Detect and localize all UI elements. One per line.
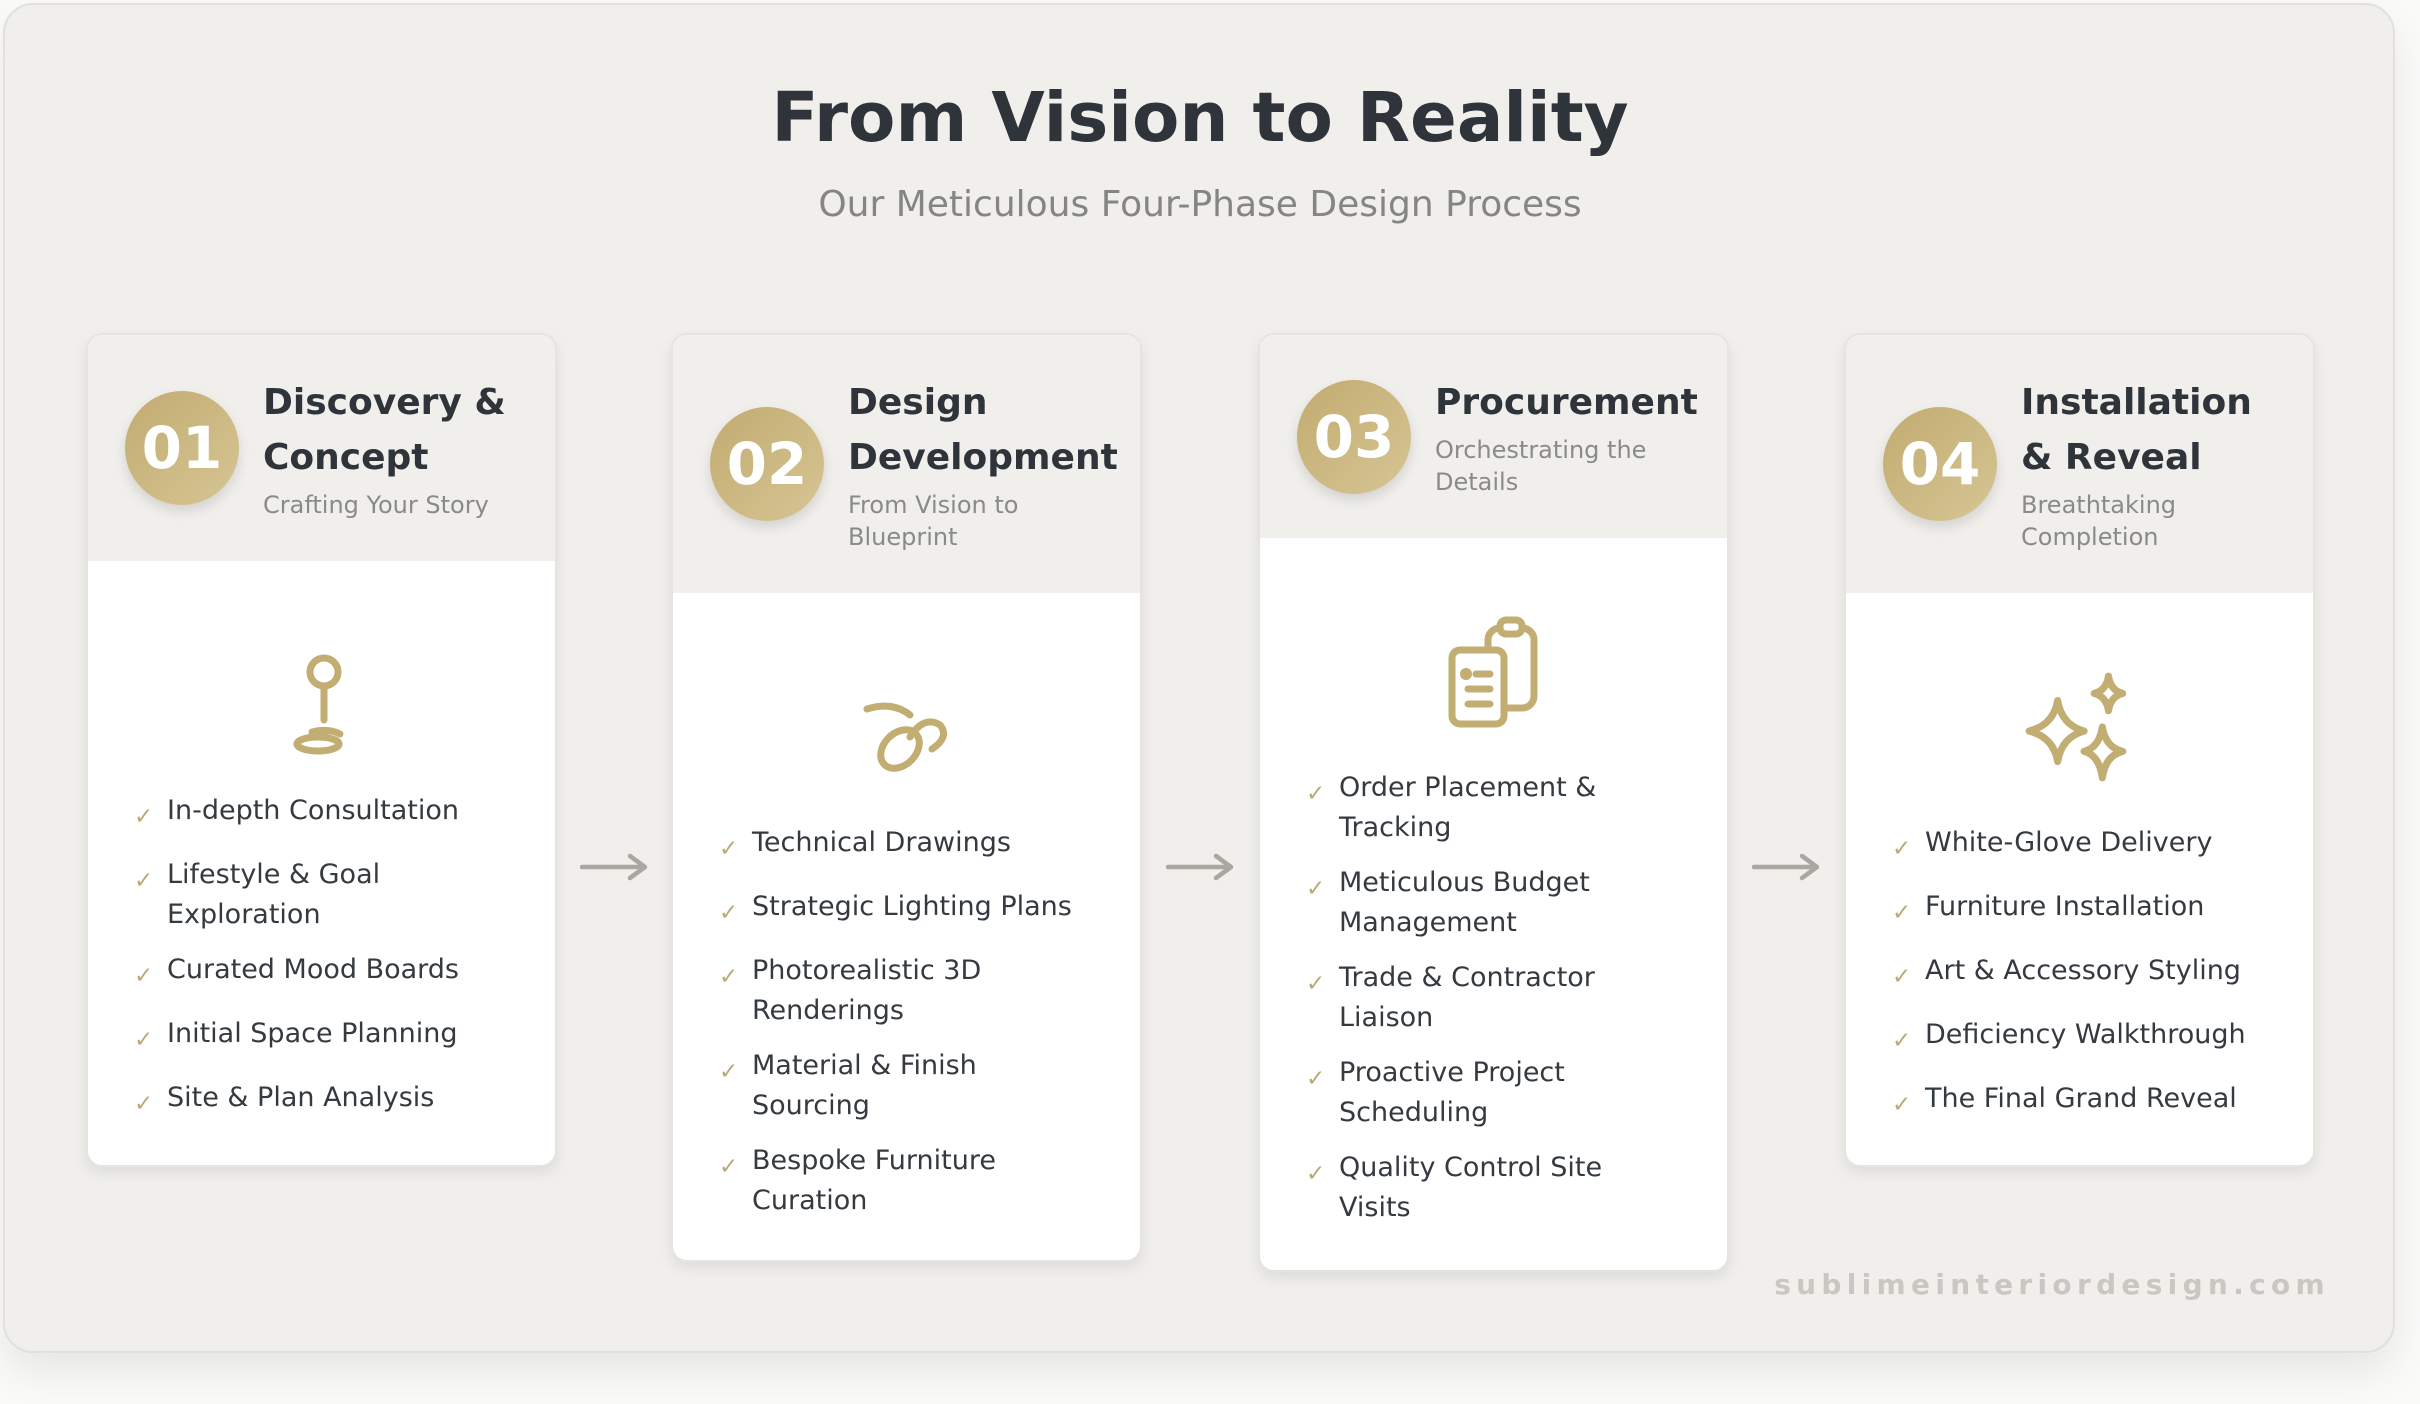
number badge 01: 01 [142,414,222,482]
list: procurement steps: Proactive Project [1339,1057,1565,1088]
card 2 header [673,335,1140,593]
card 1 body [138,654,459,1113]
number badge 04: 04 [1900,430,1980,498]
panel: card 1 discovery [86,333,557,1167]
list: design steps: Bespoke Furniture [752,1145,996,1176]
list: design steps: Technical Drawings [752,827,1011,858]
list: procurement steps: Tracking [1339,812,1451,843]
card 3 heading: Procurement [1435,382,1698,423]
list: discovery steps: Curated Mood Boards [167,954,459,985]
number badge 03: 03 [1314,402,1394,470]
icon: pin [294,654,344,754]
panel: card 3 procurement [1258,333,1729,1272]
icon: link [864,702,948,772]
number badge 02 [710,407,824,521]
card 4 heading: & Reveal [2021,437,2202,478]
list: procurement steps: Meticulous Budget [1339,867,1590,898]
card 4 heading: Installation [2021,382,2252,423]
list: installation steps: Art & Accessory Styling [1925,955,2241,986]
card 1 heading: Concept [263,437,429,478]
list: discovery steps: In-depth Consultation [167,795,459,826]
card 3 heading: Orchestrating the [1435,436,1646,464]
card 3 header [1260,335,1727,538]
list: installation steps [1896,827,2246,1114]
card 4 heading: Completion [2021,523,2158,551]
list: procurement steps: Management [1339,907,1517,938]
card 2 heading [848,382,1118,551]
card 1 header [88,335,555,561]
list: procurement steps: Scheduling [1339,1097,1488,1128]
card 2 heading: Design [848,382,987,423]
number badge 01 [125,391,239,505]
card 4 heading: Breathtaking [2021,491,2176,519]
list: design steps [722,827,1072,1216]
arrow 3 [1752,854,1820,880]
title: From Vision to Reality [771,78,1629,158]
list: discovery steps: Site & Plan Analysis [167,1082,434,1113]
list: discovery steps: Initial Space Planning [167,1018,457,1049]
list: procurement steps: Order Placement & [1339,772,1596,803]
list: procurement steps: Liaison [1339,1002,1433,1033]
card 2 heading: Development [848,437,1118,478]
list: procurement steps [1310,772,1602,1223]
list: installation steps: The Final Grand Reveal [1925,1083,2237,1114]
list: design steps: Sourcing [752,1090,870,1121]
number badge 03 [1297,380,1411,494]
list: installation steps: White-Glove Delivery [1925,827,2212,858]
list: installation steps: Furniture Installation [1925,891,2204,922]
panel: card 2 design [671,333,1142,1262]
list: discovery steps: Lifestyle & Goal [167,859,380,890]
footer website: sublimeinteriordesign.com [1774,1268,2330,1301]
list: discovery steps: Exploration [167,899,321,930]
list: installation steps: Deficiency Walkthrough [1925,1019,2246,1050]
number badge 02: 02 [727,430,807,498]
list: design steps: Renderings [752,995,904,1026]
number badge 04 [1883,407,1997,521]
card 1 heading: Discovery & [263,382,506,423]
arrow 1 [580,854,648,880]
list: procurement steps: Quality Control Site [1339,1152,1602,1183]
list: design steps: Material & Finish [752,1050,977,1081]
arrow 2 [1166,854,1234,880]
panel: card 4 installation [1844,333,2315,1167]
icon: sparkles [2026,672,2126,782]
icon: clipboard [1448,616,1538,728]
card 3 heading [1435,382,1698,496]
list: design steps: Strategic Lighting Plans [752,891,1072,922]
card 2 body [722,702,1072,1216]
card 4 heading [2021,382,2252,551]
list: discovery steps [138,795,459,1113]
card 1 heading [263,382,506,519]
card 3 body [1310,616,1602,1223]
list: design steps: Curation [752,1185,867,1216]
list: procurement steps: Visits [1339,1192,1411,1223]
card 2 heading: From Vision to [848,491,1018,519]
card 3 heading: Details [1435,468,1518,496]
list: procurement steps: Trade & Contractor [1339,962,1595,993]
card 4 header [1846,335,2313,593]
card 2 heading: Blueprint [848,523,958,551]
subtitle: Our Meticulous Four-Phase Design Process [818,184,1582,225]
list: design steps: Photorealistic 3D [752,955,981,986]
card 1 heading: Crafting Your Story [263,491,489,519]
card 4 body [1896,672,2246,1114]
